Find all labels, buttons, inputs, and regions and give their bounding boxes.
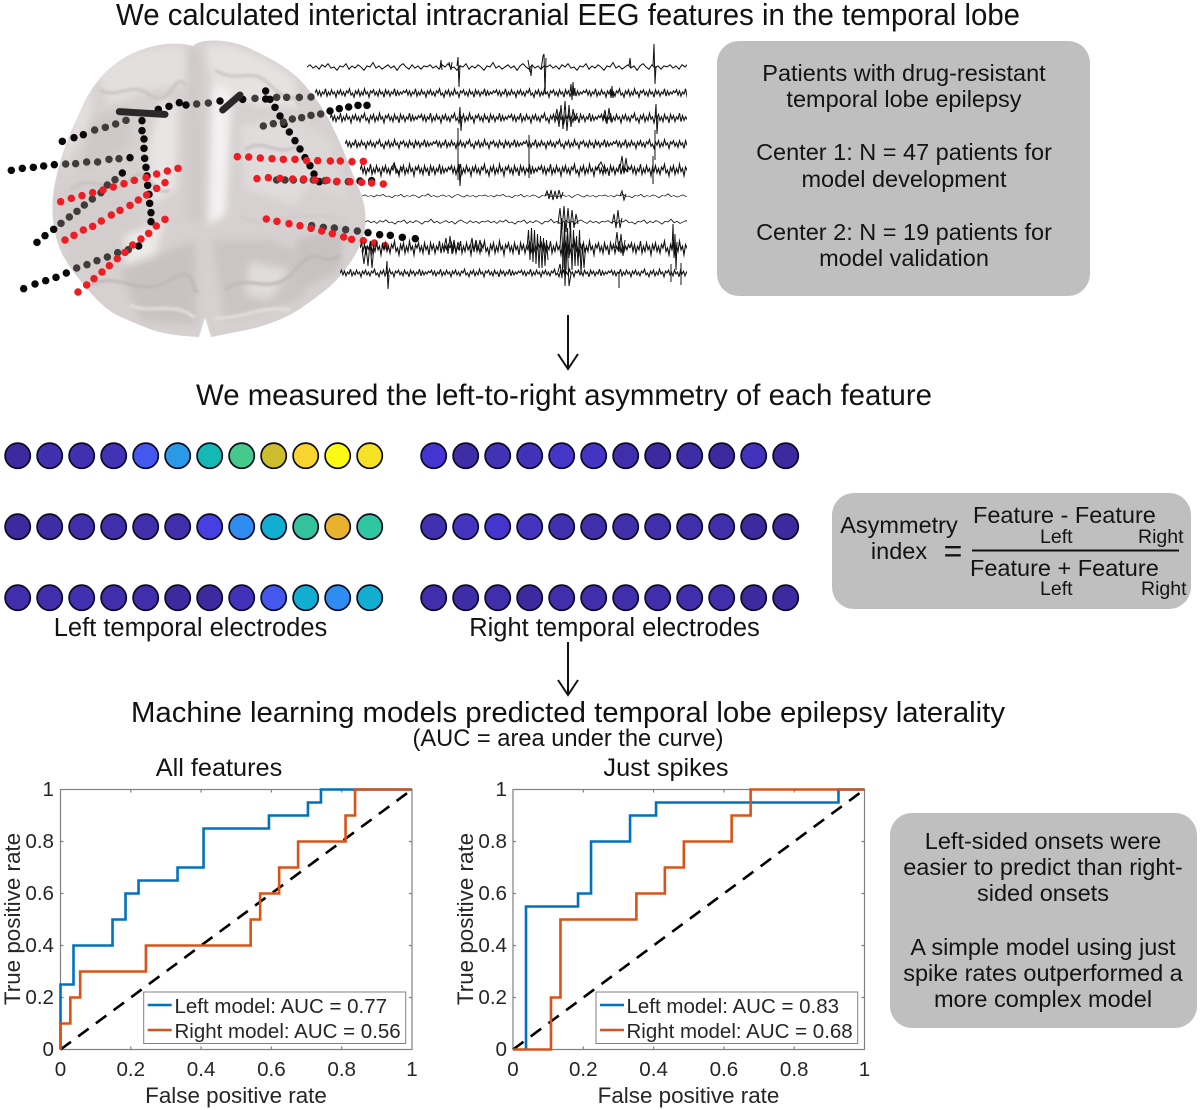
legend: Left model: AUC = 0.83: [626, 995, 839, 1018]
y tick labels: 0.8: [478, 830, 507, 853]
x tick labels: [55, 1058, 418, 1081]
chart: all features ROC: [0, 754, 418, 1108]
heading: asymmetry: We measured the left-to-right asymmetry of each feature: [196, 379, 932, 412]
x tick labels: 0.8: [327, 1058, 356, 1081]
formula: Left: [1040, 578, 1073, 600]
formula: Right: [1141, 578, 1187, 600]
y tick labels: 0.4: [25, 934, 54, 957]
patient cohort text: Center 1: N = 47 patients for: [756, 139, 1052, 165]
chart title: All features: [156, 754, 282, 782]
EEG channel 9: [340, 236, 687, 289]
y tick labels: [478, 778, 507, 1061]
legend: [596, 992, 858, 1044]
y tick labels: 0.6: [478, 882, 507, 905]
legend: Right model: AUC = 0.56: [174, 1020, 401, 1043]
formula: [840, 502, 1187, 600]
conclusions text: A simple model using just: [910, 934, 1176, 960]
conclusions text: more complex model: [934, 986, 1152, 1012]
formula: index: [871, 538, 927, 564]
y tick labels: 0.2: [478, 986, 507, 1009]
patient cohort text: [756, 60, 1052, 271]
conclusions text: Left-sided onsets were: [925, 828, 1161, 854]
y axis label: True positive rate: [0, 833, 25, 1005]
right temporal electrode colour grid: [421, 443, 798, 610]
x tick labels: 0.8: [780, 1058, 809, 1081]
chart title: Just spikes: [603, 754, 729, 782]
y tick labels: 0.2: [25, 986, 54, 1009]
y tick labels: 0: [496, 1038, 507, 1061]
y tick labels: 0.8: [25, 830, 54, 853]
black electrode strips: [11, 91, 415, 289]
axes and ticks: [513, 790, 864, 1050]
heading: machine learning: Machine learning models predicted temporal lobe epilepsy laterality: [131, 697, 1006, 729]
x tick labels: 0: [507, 1058, 519, 1081]
legend: Right model: AUC = 0.68: [626, 1020, 853, 1043]
EEG traces: [307, 44, 687, 289]
patient cohort text: Center 2: N = 19 patients for: [756, 219, 1052, 245]
y tick labels: 1: [43, 778, 54, 801]
formula: =: [944, 533, 962, 569]
formula: Left: [1040, 526, 1073, 548]
x tick labels: 1: [406, 1058, 418, 1081]
label: left temporal electrodes: Left temporal electrodes: [54, 614, 327, 642]
formula: Asymmetry: [840, 512, 958, 538]
x tick labels: 0.6: [710, 1058, 738, 1081]
y tick labels: 0.6: [25, 882, 54, 905]
x tick labels: 0: [55, 1058, 66, 1081]
formula: Right: [1138, 526, 1184, 548]
x tick labels: 0.4: [187, 1058, 215, 1081]
EEG channel 1: [307, 44, 687, 94]
ROC curves: [513, 790, 864, 1050]
legend: [144, 992, 406, 1044]
red electrode strips: [61, 157, 385, 292]
y tick labels: 1: [496, 778, 507, 801]
y tick labels: [25, 778, 54, 1061]
patient cohort text: temporal lobe epilepsy: [786, 86, 1022, 112]
x axis label: False positive rate: [598, 1083, 779, 1108]
chart: just spikes ROC: [453, 754, 870, 1108]
panel: patient cohorts: [717, 41, 1090, 296]
patient cohort text: Patients with drug-resistant: [762, 60, 1046, 86]
formula: Feature + Feature: [970, 555, 1159, 581]
formula: Feature - Feature: [973, 502, 1156, 528]
x tick labels: 0.2: [569, 1058, 598, 1081]
EEG channel 6: [362, 190, 687, 202]
EEG channel 2: [315, 82, 687, 104]
EEG channel 4: [345, 128, 687, 180]
y tick labels: 0.4: [478, 934, 507, 957]
y tick labels: 0: [43, 1038, 54, 1061]
patient cohort text: model development: [801, 166, 1007, 192]
x tick labels: 0.6: [257, 1058, 286, 1081]
x axis label: False positive rate: [145, 1083, 327, 1108]
EEG channel 7: [365, 206, 687, 232]
EEG channel 5: [360, 156, 687, 186]
x tick labels: 0.4: [639, 1058, 668, 1081]
x tick labels: 0.2: [116, 1058, 145, 1081]
EEG channel 8: [360, 218, 687, 274]
EEG channel 3: [330, 101, 687, 134]
axes and ticks: [60, 790, 412, 1050]
label: right temporal electrodes: Right temporal electrodes: [469, 614, 760, 642]
conclusions text: easier to predict than right-: [903, 854, 1183, 880]
conclusions text: sided onsets: [977, 880, 1109, 906]
conclusions text: spike rates outperformed a: [903, 960, 1184, 986]
panel: conclusions: [890, 813, 1197, 1028]
subheading: AUC definition: (AUC = area under the curve): [412, 726, 724, 752]
x tick labels: 1: [859, 1058, 870, 1081]
legend: Left model: AUC = 0.77: [174, 995, 387, 1018]
x tick labels: [507, 1058, 870, 1081]
y axis label: True positive rate: [453, 833, 478, 1005]
brain silhouette: [45, 35, 370, 340]
conclusions text: [903, 828, 1184, 1012]
ROC curves: [60, 790, 412, 1050]
arrow: asymmetry to models: [558, 642, 578, 695]
brain illustration with electrodes: [11, 35, 415, 340]
patient cohort text: model validation: [819, 245, 989, 271]
arrow: features to asymmetry: [558, 315, 578, 369]
left temporal electrode colour grid: [5, 443, 382, 610]
panel: asymmetry index formula: [832, 493, 1191, 609]
